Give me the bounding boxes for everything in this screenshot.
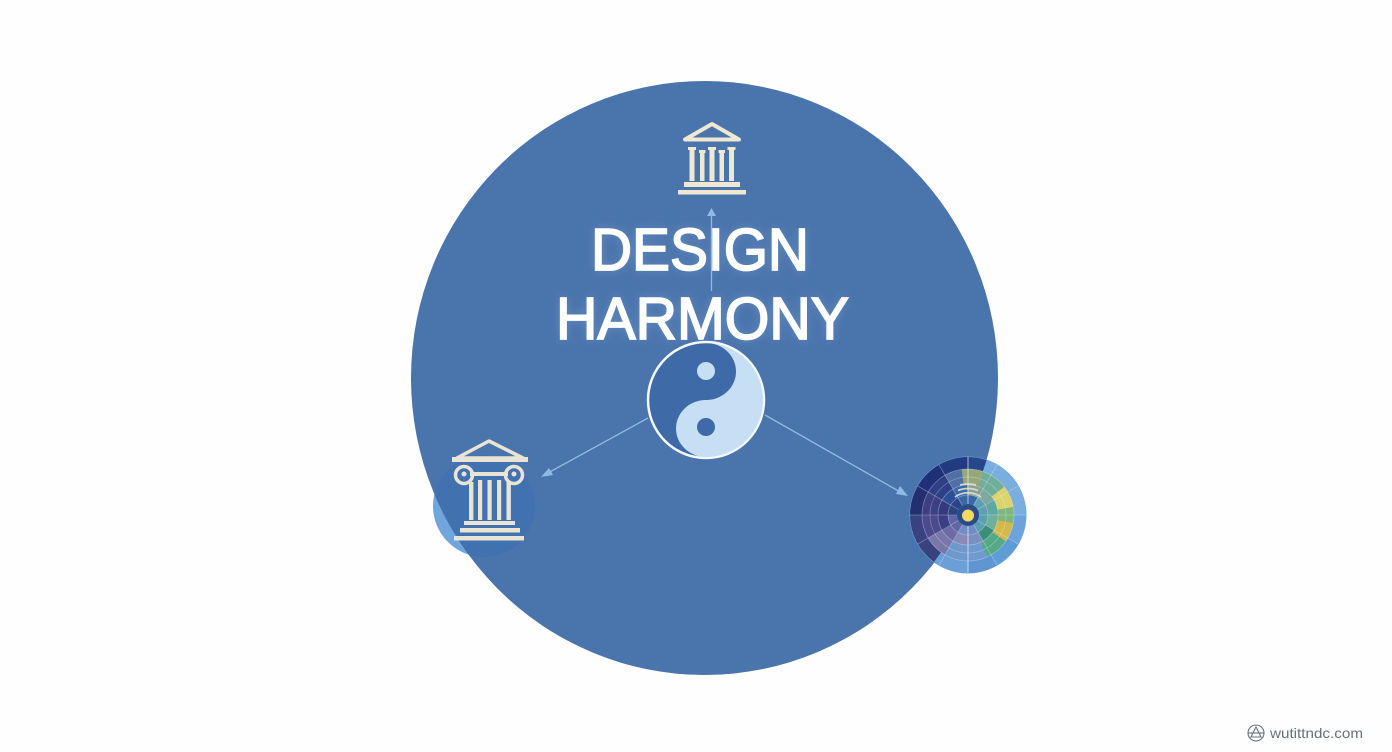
inner ring — [952, 500, 984, 530]
title line 1: DESIGN — [591, 217, 809, 283]
second ring — [930, 477, 1006, 553]
icon: yin yang — [648, 342, 764, 458]
third ring — [943, 490, 993, 540]
panel: main blue circle — [411, 81, 998, 675]
title line 2: HARMONY — [556, 286, 849, 352]
yin yang light half — [676, 343, 763, 457]
chart: radial colour wheel — [910, 456, 1026, 574]
steps — [454, 521, 524, 540]
icon: top temple — [678, 124, 746, 194]
columns — [688, 147, 736, 181]
pediment — [457, 441, 523, 458]
watermark text: wutittndc.com — [1269, 725, 1363, 741]
watermark icon — [1248, 725, 1264, 741]
architrave — [452, 457, 528, 462]
watermark — [1248, 725, 1363, 741]
title — [556, 217, 849, 352]
capital with volutes — [456, 466, 522, 484]
steps — [678, 182, 746, 194]
dark dot — [697, 418, 715, 436]
pale arcs above hub — [955, 484, 981, 497]
left disc tint inside the main circle — [433, 455, 535, 557]
light dot — [697, 362, 715, 380]
icon: left temple — [452, 441, 528, 540]
yellow centre — [962, 510, 974, 522]
wheel base — [910, 456, 1026, 574]
outer ring — [916, 463, 1020, 567]
yin yang dark base — [648, 342, 764, 458]
title glow — [556, 217, 849, 352]
arrow: centre to left temple — [541, 418, 648, 477]
title glow: DESIGN — [591, 217, 809, 283]
columns — [469, 480, 511, 520]
light blue disc behind left temple — [433, 455, 535, 557]
infographic canvas — [411, 81, 1362, 742]
arrow: centre up to top temple — [707, 208, 716, 291]
wheel grid lines — [910, 457, 1026, 573]
title glow: HARMONY — [556, 286, 849, 352]
pediment — [685, 124, 739, 140]
arrow: centre to radial chart — [765, 415, 908, 496]
hub — [957, 504, 979, 526]
